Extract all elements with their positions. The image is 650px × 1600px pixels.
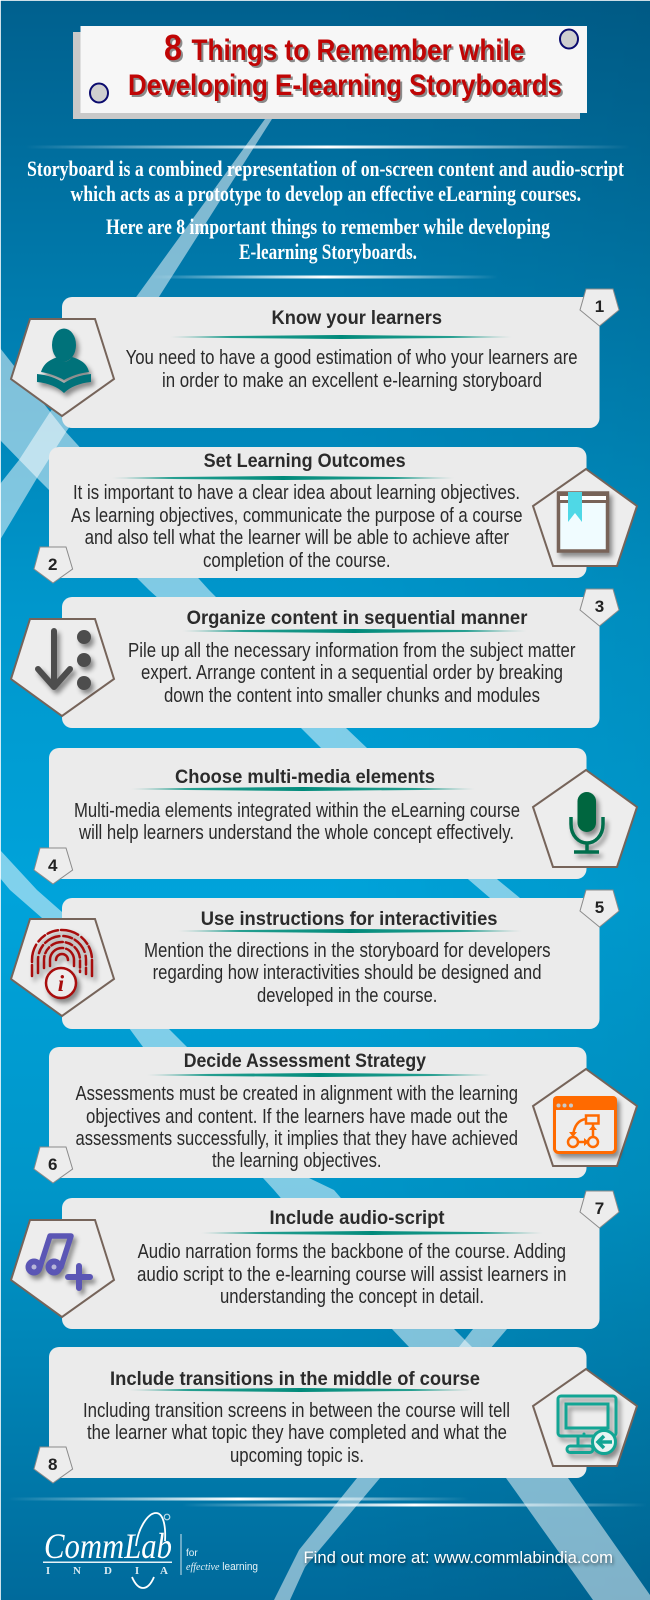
- heading 6: Decide Assessment Strategy: [184, 1050, 426, 1072]
- icon: book with bookmark: [533, 469, 637, 566]
- number badge 6: [34, 1147, 73, 1183]
- body 4: [74, 800, 520, 844]
- body 1: in order to make an excellent e-learning storyboard: [162, 370, 542, 392]
- body 2: completion of the course.: [203, 550, 391, 572]
- number badge 8: [34, 1447, 73, 1483]
- body 1: You need to have a good estimation of who your learners are: [126, 347, 578, 369]
- intro text: E-learning Storyboards.: [239, 239, 417, 264]
- logo: CommLab India: [43, 1513, 258, 1588]
- body 3: down the content into smaller chunks and modules: [164, 685, 540, 707]
- title line 1: 8: [164, 27, 182, 68]
- number badge 1: 1: [595, 297, 604, 316]
- body 8: Including transition screens in between the course will tell: [83, 1400, 510, 1422]
- icon: fingerprint with info: i: [58, 971, 65, 996]
- body 2: [71, 482, 522, 572]
- icon: sequence arrow and dots: [11, 619, 114, 716]
- body 3: [128, 640, 576, 707]
- panel: 6 assessment strategy: [34, 1047, 637, 1183]
- number badge 5: 5: [595, 898, 604, 917]
- number badge 7: 7: [595, 1199, 604, 1218]
- heading 4: Choose multi-media elements: [175, 766, 435, 788]
- body 7: understanding the concept in detail.: [220, 1286, 484, 1308]
- title line 2: Developing E-learning Storyboards: [128, 69, 562, 102]
- panel: 2 set learning outcomes: [34, 447, 637, 583]
- body 6: assessments successfully, it implies that they have achieved: [76, 1128, 518, 1150]
- body 6: Assessments must be created in alignment with the learning: [76, 1083, 518, 1105]
- body 2: and also tell what the learner will be able to achieve after: [85, 527, 509, 549]
- footer divider lines: [8, 1498, 647, 1506]
- icon: flowchart window: [533, 1069, 637, 1166]
- body 8: [83, 1400, 510, 1467]
- intro text: [25, 146, 630, 278]
- body 2: As learning objectives, communicate the purpose of a course: [71, 505, 522, 527]
- heading 7: Include audio-script: [270, 1207, 445, 1229]
- body 6: objectives and content. If the learners have made out the: [86, 1106, 508, 1128]
- body 4: Multi-media elements integrated within the eLearning course: [74, 800, 520, 822]
- heading 3: Organize content in sequential manner: [187, 607, 528, 629]
- title line 1: [164, 27, 524, 68]
- body 5: [144, 940, 551, 1007]
- number badge 4: [34, 848, 73, 884]
- icon: learner reading: [11, 319, 114, 416]
- icon: microphone: [533, 770, 637, 867]
- body 1: [126, 347, 578, 392]
- heading 2: Set Learning Outcomes: [204, 450, 406, 472]
- number badge 3: 3: [595, 597, 604, 616]
- decorative pins: [90, 30, 578, 102]
- icon: music notes plus: [11, 1220, 114, 1317]
- logo: CommLab India: D: [104, 1565, 112, 1577]
- icon: fingerprint with info: [11, 919, 114, 1016]
- logo: CommLab India: for: [186, 1548, 198, 1559]
- number badge 4: 4: [48, 856, 58, 875]
- number badge 5: [580, 890, 619, 927]
- body 4: will help learners understand the whole concept effectively.: [78, 822, 514, 844]
- number badge 2: 2: [48, 555, 57, 574]
- body 5: Mention the directions in the storyboard for developers: [144, 940, 551, 962]
- logo: CommLab India: A: [160, 1565, 168, 1577]
- panel: 8 transitions: [34, 1347, 637, 1483]
- logo: CommLab India: CommLab: [44, 1526, 172, 1566]
- logo: CommLab India: N: [73, 1565, 81, 1577]
- body 8: upcoming topic is.: [230, 1445, 364, 1467]
- number badge 8: 8: [48, 1455, 57, 1474]
- heading 5: Use instructions for interactivities: [201, 908, 498, 930]
- body 5: regarding how interactivities should be designed and: [153, 962, 542, 984]
- body 3: expert. Arrange content in a sequential order by breaking: [141, 662, 563, 684]
- number badge 1: [580, 289, 619, 326]
- number badge 2: [34, 547, 73, 583]
- body 7: Audio narration forms the backbone of the course. Adding: [138, 1241, 566, 1263]
- panel: 5 instructions for interactivities: [11, 890, 619, 1029]
- heading 1: Know your learners: [272, 307, 442, 329]
- footer call to action: Find out more at: www.commlabindia.com: [304, 1548, 613, 1567]
- panel: 3 organize content: [11, 589, 619, 728]
- logo: CommLab India: effective learning: [186, 1561, 258, 1573]
- logo: CommLab India: I: [46, 1565, 50, 1577]
- number badge 7: [580, 1191, 619, 1228]
- body 8: the learner what topic they have completed and what the: [87, 1422, 507, 1444]
- panel: 4 multi-media: [34, 748, 637, 884]
- body 6: the learning objectives.: [212, 1150, 382, 1172]
- number badge 3: [580, 589, 619, 626]
- intro text: Here are 8 important things to remember while developing: [106, 214, 550, 239]
- body 7: [137, 1241, 566, 1308]
- body 3: Pile up all the necessary information from the subject matter: [128, 640, 576, 662]
- title panel: [73, 26, 587, 119]
- logo: CommLab India: I: [135, 1565, 139, 1577]
- body 7: audio script to the e-learning course will assist learners in: [137, 1264, 566, 1286]
- title line 1: Things to Remember while: [192, 34, 524, 67]
- panel: 7 audio-script: [11, 1191, 619, 1329]
- body 2: It is important to have a clear idea about learning objectives.: [73, 482, 520, 504]
- body 5: developed in the course.: [257, 985, 437, 1007]
- panel: 1 know your learners: [11, 289, 619, 428]
- body 6: [76, 1083, 518, 1172]
- heading 8: Include transitions in the middle of course: [110, 1368, 480, 1390]
- icon: monitor with back arrow: [533, 1369, 637, 1466]
- number badge 6: 6: [48, 1155, 57, 1174]
